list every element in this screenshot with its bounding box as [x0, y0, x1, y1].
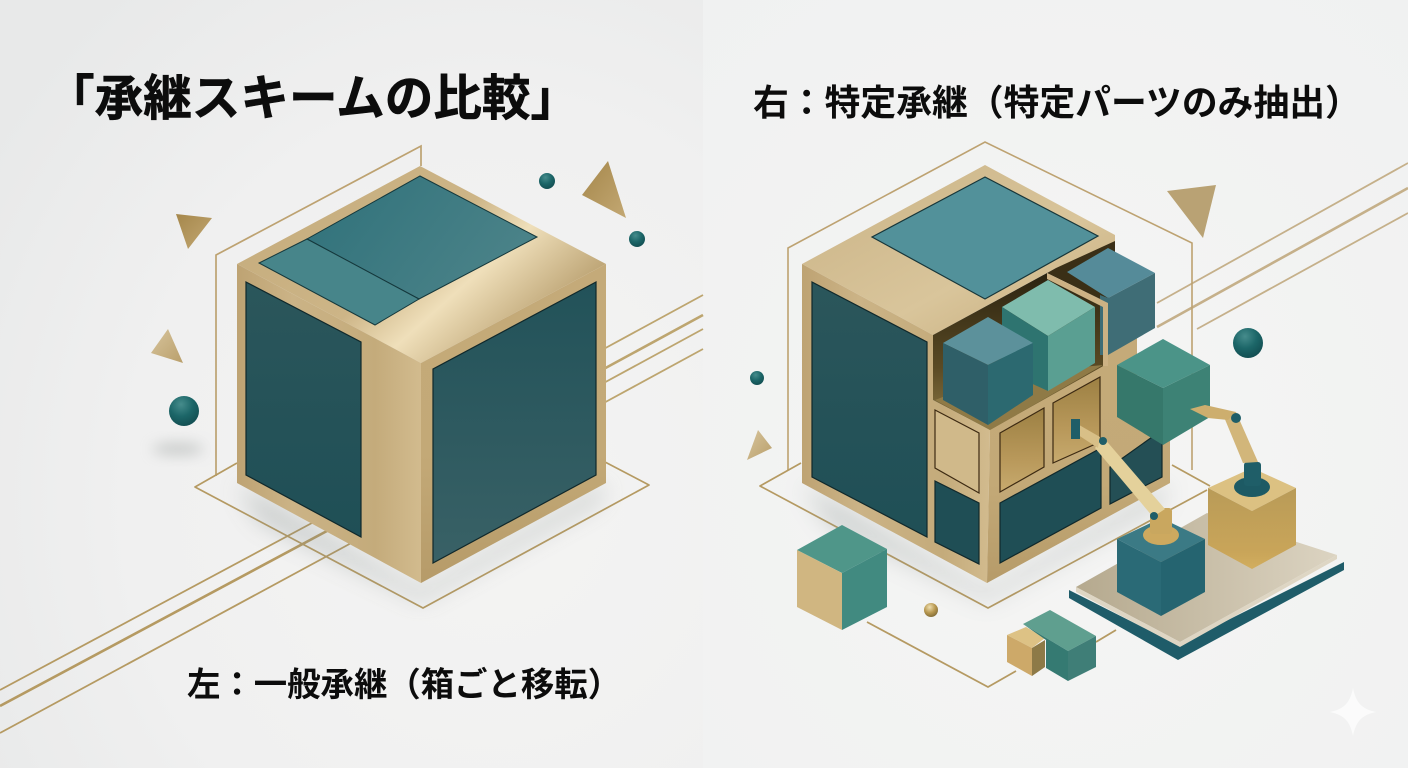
icon: large teal sphere — [169, 396, 199, 426]
robot arm left — [1071, 419, 1179, 545]
cube top face — [237, 166, 606, 363]
left ground rails — [0, 516, 355, 733]
icon: gold triangle upper right — [582, 161, 626, 218]
gold robot base box — [1208, 468, 1296, 569]
lower left teal panel — [935, 481, 979, 564]
floor outline — [195, 462, 649, 608]
cavity floor — [935, 365, 1103, 430]
inner cube: light green — [1002, 280, 1095, 391]
hexagon outline — [216, 146, 421, 476]
right teal panel — [433, 282, 596, 563]
background: left panel — [0, 0, 703, 768]
top teal panel — [872, 177, 1098, 299]
cube shadow — [237, 483, 606, 600]
lower left gold panel — [935, 410, 979, 493]
left teal panel — [812, 282, 927, 537]
robot platform — [1069, 513, 1344, 660]
cube left face — [237, 264, 421, 583]
top panel front strip — [259, 239, 419, 325]
left teal panel — [246, 282, 361, 537]
open cube — [802, 165, 1170, 583]
icon: gold triangle left — [151, 329, 183, 363]
right rails — [1157, 163, 1408, 329]
lower connector line — [867, 622, 1116, 687]
extracted green cube — [1117, 339, 1210, 445]
front right gold face — [987, 336, 1170, 583]
panel: left general succession illustration — [0, 146, 703, 733]
title: 「承継スキームの比較」 — [46, 72, 579, 126]
background: right panel — [703, 0, 1408, 768]
top panel rear — [307, 176, 537, 299]
solid cube — [237, 166, 606, 583]
cavity — [933, 273, 1105, 430]
inner gold strip — [1047, 273, 1108, 366]
far right teal panel — [1110, 430, 1162, 504]
icon: gold triangle upper right — [1167, 185, 1216, 238]
hexagon outline — [788, 142, 1192, 470]
right rails — [600, 295, 703, 405]
panel: right specific succession illustration — [747, 142, 1408, 687]
inner cube: rear blue — [1067, 248, 1155, 355]
front teal panel wide — [1000, 448, 1101, 563]
icon: teal sphere large — [1233, 328, 1263, 358]
gap behind rear cube — [1047, 241, 1115, 303]
icon: gold triangle upper left — [176, 214, 212, 249]
sphere shadow — [152, 443, 204, 455]
heading: right scheme: 右：特定承継（特定パーツのみ抽出） — [753, 83, 1361, 123]
icon: small teal sphere right — [629, 231, 645, 247]
small green block — [1023, 610, 1096, 681]
icon: teal sphere small — [750, 371, 764, 385]
heading: left scheme: 左：一般承継（箱ごと移転） — [187, 667, 621, 704]
inner cube: front blue — [943, 317, 1033, 425]
bottom left gold-green cube — [797, 525, 887, 630]
cube top face — [802, 165, 1115, 335]
small gold block — [1007, 627, 1045, 676]
cube shadow — [802, 483, 1170, 600]
icon: gold triangle left — [747, 430, 772, 460]
icon: sparkle watermark — [1330, 688, 1376, 736]
left gold face — [802, 264, 990, 583]
front gold panel 1 — [1000, 408, 1044, 492]
blue robot base box — [1117, 518, 1205, 616]
floor outline — [760, 463, 1210, 608]
icon: small teal sphere — [539, 173, 555, 189]
icon: gold sphere small — [924, 603, 938, 617]
cube right face — [421, 264, 606, 583]
front gold panel 2 — [1053, 377, 1100, 463]
robot arm right — [1190, 405, 1270, 497]
